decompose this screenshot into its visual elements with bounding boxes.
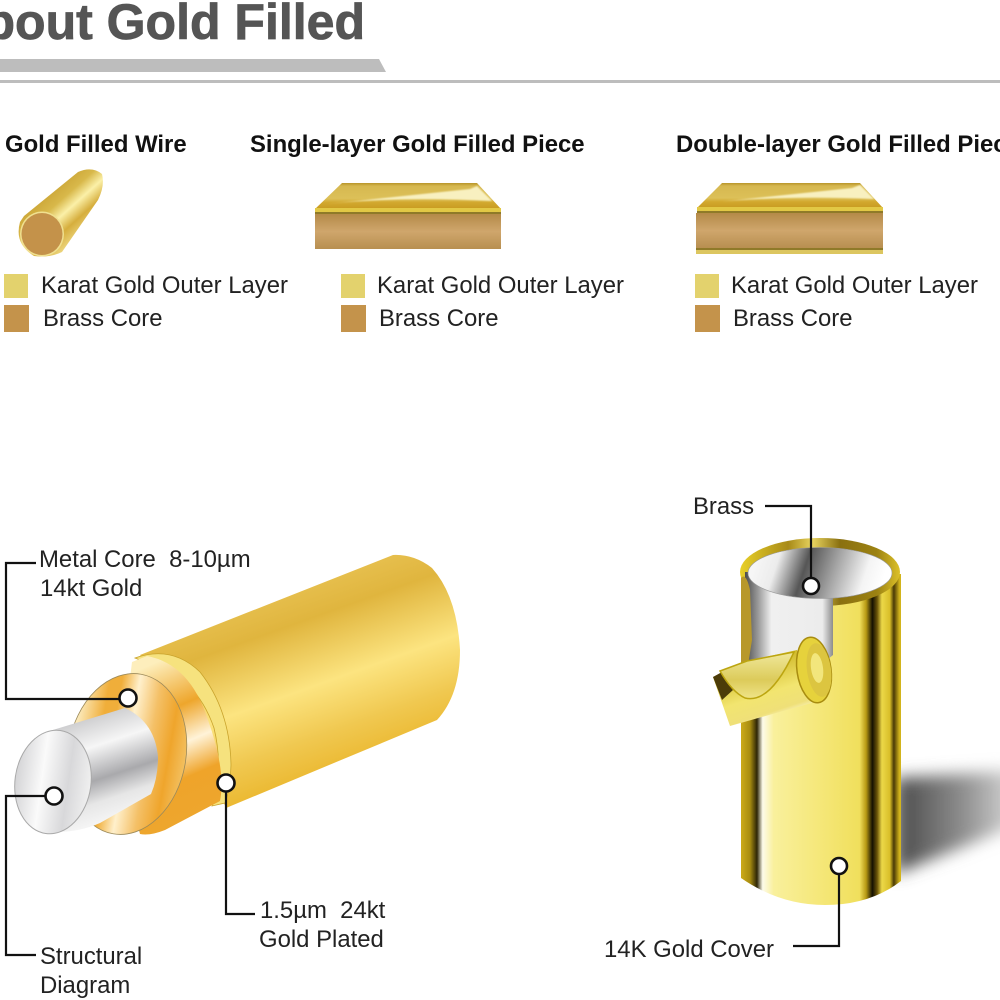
legend: single-layer: [341, 272, 624, 332]
side tube: [713, 650, 815, 726]
legend: wire: Karat Gold Outer Layer: [41, 272, 288, 299]
panel: single-layer piece: [250, 131, 624, 332]
inner silver opening: [748, 548, 892, 598]
icon: double-layer block: [696, 183, 883, 254]
middle orange cylinder: [120, 656, 222, 834]
silver core: [43, 708, 158, 832]
callout: structural diagram: [6, 788, 142, 999]
legend: double-layer: [695, 272, 978, 332]
tube body: [741, 574, 901, 909]
side tube end: [793, 635, 835, 705]
heading: single-layer piece: Single-layer Gold Filled Piece: [250, 131, 585, 158]
middle layer face: [55, 664, 199, 844]
gold rim: [135, 654, 231, 806]
callout: metal core: Metal Core 8-10µm: [39, 546, 251, 573]
side tube detail: [713, 672, 733, 700]
diagram: gold cover tube: [713, 538, 901, 909]
callout: brass: Brass: [693, 493, 754, 520]
side tube scoop: [720, 652, 794, 699]
silver core face: [8, 725, 98, 839]
callout: metal core: [6, 546, 251, 706]
callout: gold plated: [218, 774, 386, 953]
callout: gold plated: Gold Plated: [259, 926, 384, 953]
legend: double-layer: Brass Core: [733, 305, 852, 332]
top rim: [740, 538, 900, 606]
heading: gold filled wire: Gold Filled Wire: [5, 131, 187, 158]
panel: gold filled wire: [4, 131, 288, 332]
cutaway window: [745, 572, 833, 690]
title underline bar: [0, 59, 1000, 83]
panel: double-layer piece: [676, 131, 1000, 332]
outer gold cylinder: [140, 555, 460, 808]
callout: metal core: 14kt Gold: [40, 575, 142, 602]
callout: brass: [693, 493, 819, 594]
diagram: gold wire layers: [8, 555, 460, 844]
legend: wire: Brass Core: [43, 305, 162, 332]
legend: single-layer: Brass Core: [379, 305, 498, 332]
shadow: [895, 770, 1000, 874]
left tube edge: [741, 576, 752, 680]
legend: double-layer: Karat Gold Outer Layer: [731, 272, 978, 299]
icon: wire cross-section: [19, 169, 103, 256]
callout: structural diagram: Structural: [40, 943, 142, 970]
icon: single-layer block: [315, 183, 501, 249]
callout: gold plated: 1.5µm 24kt: [260, 897, 386, 924]
callout: 14K gold cover: 14K Gold Cover: [604, 936, 774, 963]
legend: single-layer: Karat Gold Outer Layer: [377, 272, 624, 299]
callout: 14K gold cover: [604, 858, 847, 963]
callout: structural diagram: Diagram: [40, 972, 130, 999]
legend: wire: [4, 272, 288, 332]
